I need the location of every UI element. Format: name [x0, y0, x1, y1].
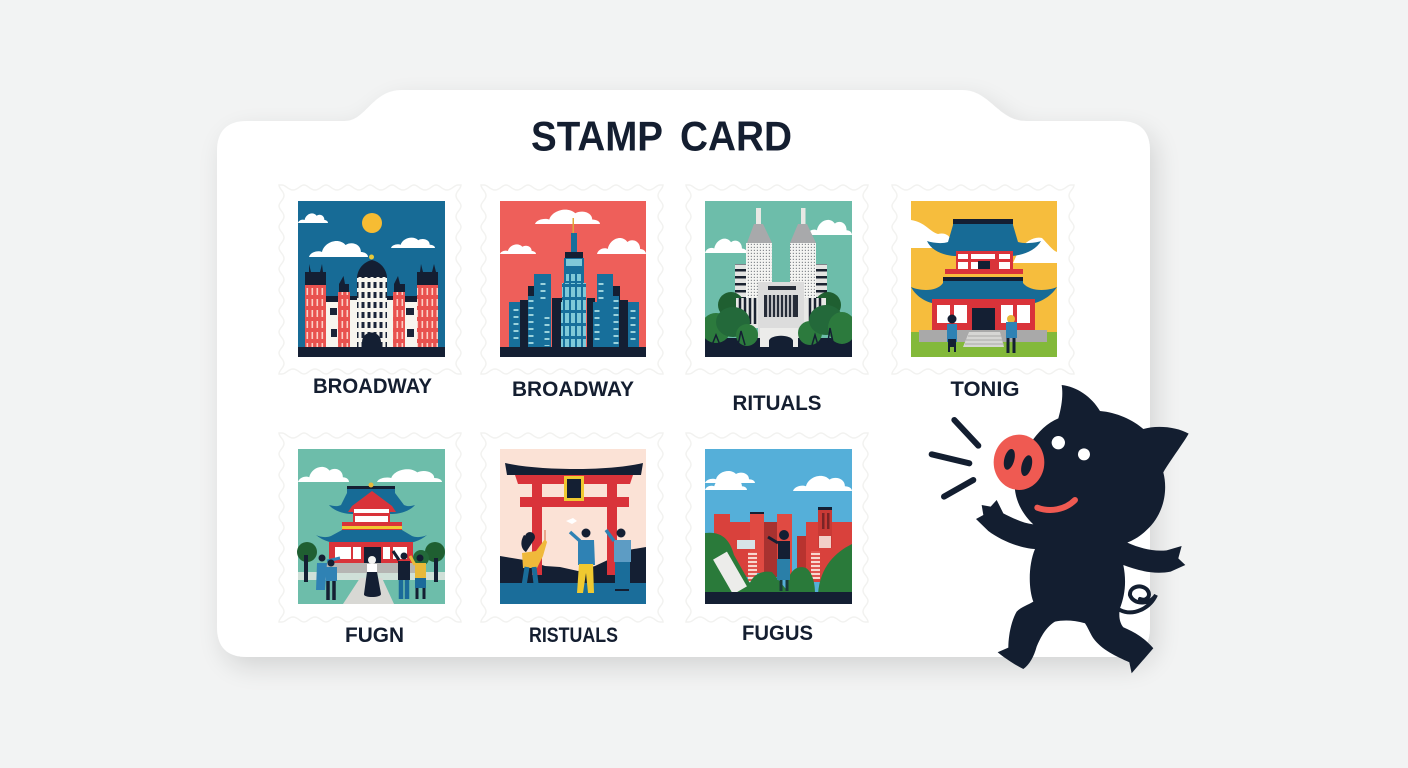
title: STAMP	[531, 112, 663, 160]
pig right nostril	[1019, 454, 1034, 477]
pig snout	[994, 435, 1044, 490]
label: Broadway second: BROADWAY	[512, 377, 634, 401]
motion lines	[932, 420, 978, 497]
pig silhouette	[976, 385, 1189, 673]
icon: pig mascot	[932, 385, 1189, 673]
pig curly tail	[1120, 586, 1156, 612]
stamp 5: teal temple with visitors	[279, 433, 461, 622]
pig right eye	[1078, 448, 1090, 460]
label: Broadway: BROADWAY	[313, 375, 432, 398]
stamp 7: red city on blue sky	[686, 433, 868, 622]
card background with top tab	[217, 90, 1150, 657]
pig left eye	[1052, 436, 1065, 449]
title: CARD	[680, 112, 792, 160]
label: Tonig: TONIG	[950, 378, 1020, 401]
pig smile	[1037, 500, 1075, 510]
pig left nostril	[1002, 448, 1017, 471]
label: Fugus: FUGUS	[742, 622, 813, 645]
label: Rituals: RITUALS	[732, 392, 822, 415]
stamp 4: pagoda on yellow	[892, 185, 1074, 374]
stamp 3: twin towers on teal	[686, 185, 868, 374]
stamp 2: red sky skyscrapers	[481, 185, 663, 374]
label: Ristuals: RISTUALS	[529, 624, 618, 647]
label: Fugn: FUGN	[345, 624, 404, 647]
panel: stamp card	[217, 90, 1150, 657]
title	[531, 112, 792, 160]
stamp 1: blue sky palace	[279, 185, 461, 374]
stamp 6: torii gate	[481, 433, 663, 622]
